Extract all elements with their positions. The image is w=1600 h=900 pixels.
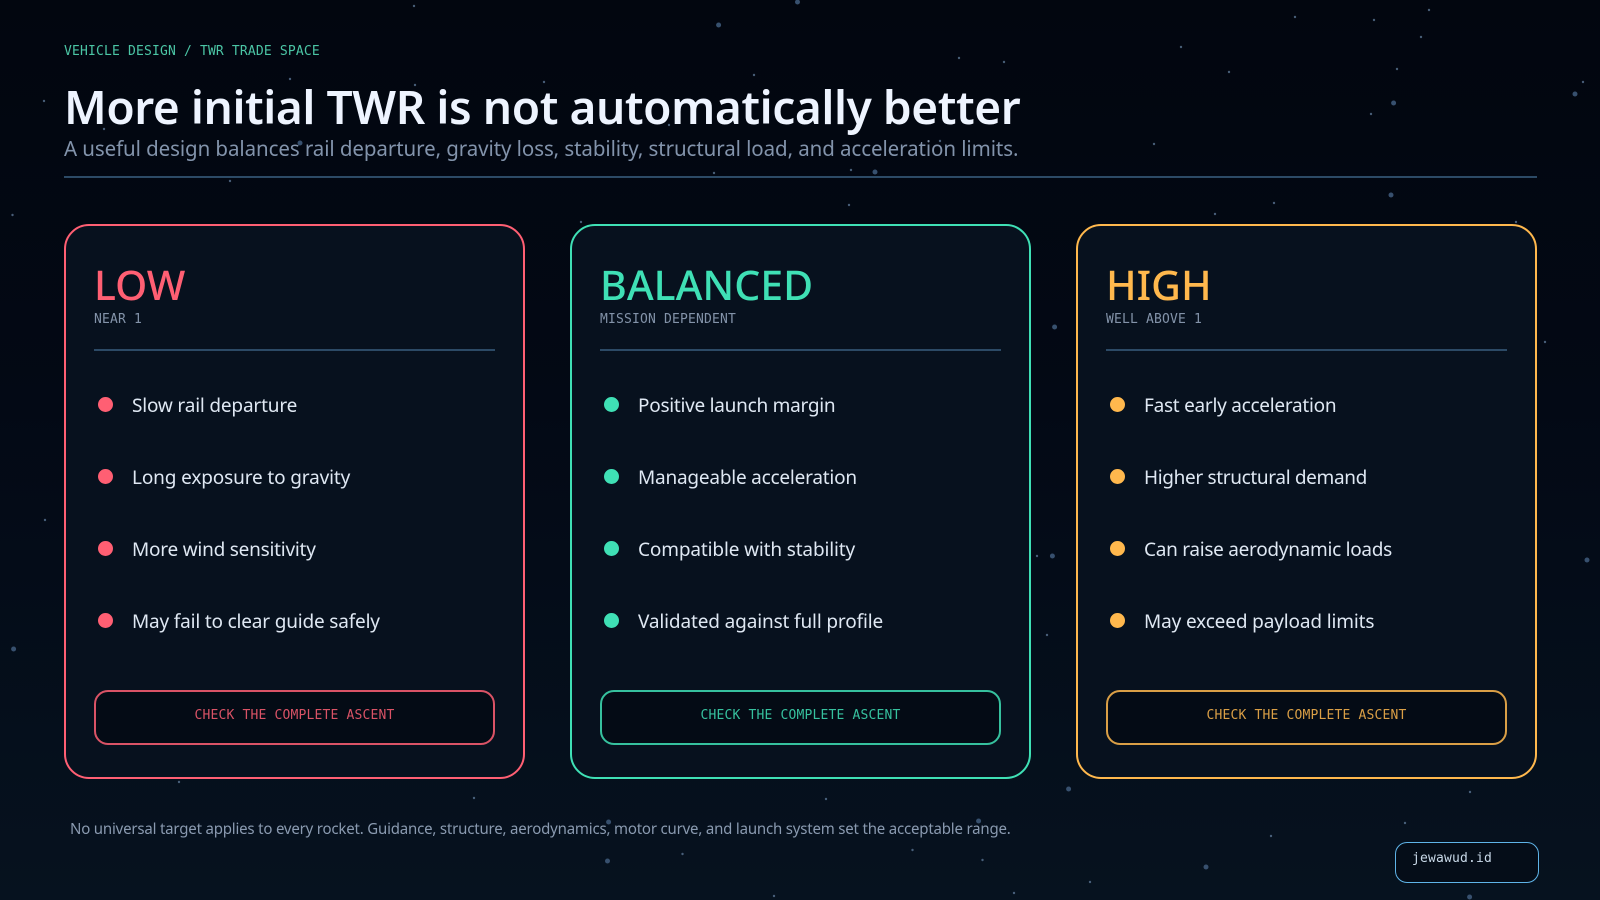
subtitle: A useful design balances rail departure, gravity loss, stability, structural load, and acceleration limits. [64,135,1018,163]
high item 2: Higher structural demand [1144,464,1367,490]
high action button [1106,690,1507,745]
low item 1: Slow rail departure [132,392,297,418]
high heading: HIGH [1106,257,1212,313]
low item 3: More wind sensitivity [132,536,316,562]
high item 3: Can raise aerodynamic loads [1144,536,1392,562]
panel: low TWR [64,224,525,779]
high item 4: May exceed payload limits [1144,608,1374,634]
low item 2: Long exposure to gravity [132,464,350,490]
balanced heading: BALANCED [600,257,813,313]
title: More initial TWR is not automatically better [64,76,1020,138]
low heading: LOW [94,257,185,313]
balanced item 4: Validated against full profile [638,608,883,634]
brand badge [1395,842,1539,883]
balanced action button: CHECK THE COMPLETE ASCENT [701,708,900,723]
eyebrow label: VEHICLE DESIGN / TWR TRADE SPACE [64,44,320,59]
header divider [64,176,1537,178]
low action button [94,690,495,745]
brand badge: jewawud.id [1412,851,1492,866]
low action button: CHECK THE COMPLETE ASCENT [195,708,394,723]
high action button: CHECK THE COMPLETE ASCENT [1207,708,1406,723]
panel: balanced TWR [570,224,1031,779]
high item 1: Fast early acceleration [1144,392,1336,418]
balanced item 3: Compatible with stability [638,536,855,562]
high range label: WELL ABOVE 1 [1106,312,1202,327]
balanced item 2: Manageable acceleration [638,464,857,490]
balanced item 1: Positive launch margin [638,392,835,418]
balanced range label: MISSION DEPENDENT [600,312,736,327]
low range label: NEAR 1 [94,312,142,327]
footer note: No universal target applies to every rocket. Guidance, structure, aerodynamics, motor curve, and launch system set the acceptable range. [70,819,1011,839]
balanced action button [600,690,1001,745]
low item 4: May fail to clear guide safely [132,608,380,634]
panel: high TWR [1076,224,1537,779]
